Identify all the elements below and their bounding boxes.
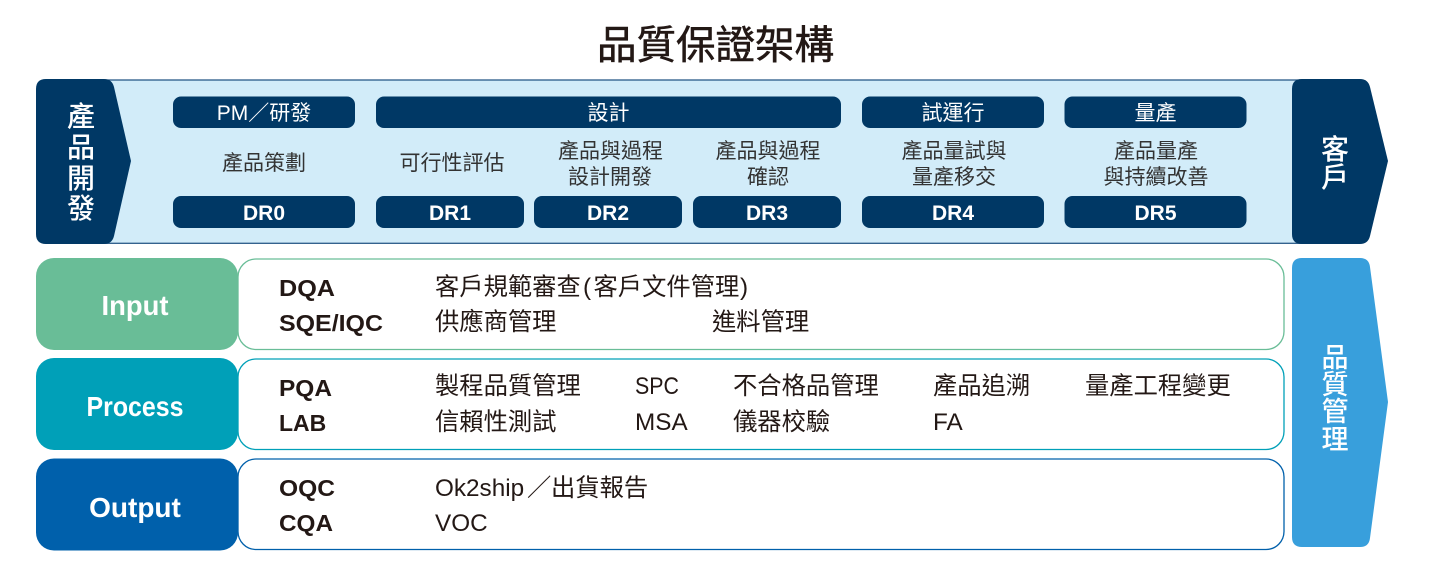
arrow: quality management (1292, 258, 1388, 547)
title: 品質保證架構 (597, 24, 834, 68)
roles and tasks: input: 供應商管理 (435, 309, 556, 336)
design review gates (173, 196, 1246, 228)
panel: product development band (36, 79, 1388, 244)
arrow: product development: 開 (67, 163, 95, 194)
arrow: customer: 客 (1321, 134, 1349, 165)
phase: mass production (1064, 96, 1246, 128)
roles and tasks: process: 信賴性測試 (435, 409, 556, 436)
label: input (36, 258, 238, 350)
roles and tasks: process: LAB (279, 410, 326, 436)
design review gates: DR4 (932, 202, 974, 225)
phase: design: 設計 (588, 102, 630, 125)
roles and tasks: output (279, 475, 648, 537)
arrow: product development (36, 79, 131, 244)
phase: trial run: 試運行 (922, 102, 984, 125)
label: output (36, 458, 238, 550)
phase: mass production: 量產 (1134, 102, 1176, 125)
label: output: Output (89, 492, 181, 523)
stage descriptions: 設計開發 (568, 166, 652, 189)
phase: PM (173, 96, 355, 128)
roles and tasks: process (279, 373, 1231, 436)
phase: trial run (862, 96, 1044, 128)
arrow: quality management: 品 (1322, 343, 1348, 373)
roles and tasks: output: OQC (279, 475, 335, 501)
stage descriptions: 產品量試與 (902, 140, 1006, 163)
stage descriptions: 產品量產 (1114, 140, 1198, 163)
roles and tasks: process: 儀器校驗 (733, 409, 830, 436)
design review gates: DR2 (587, 202, 629, 225)
arrow: quality management: 理 (1322, 425, 1348, 455)
arrow: customer (1292, 79, 1388, 244)
roles and tasks: output: CQA (279, 510, 333, 536)
roles and tasks: output: 出貨報告 (551, 475, 648, 502)
stage descriptions (222, 140, 1208, 189)
roles and tasks: input: SQE/IQC (279, 310, 383, 336)
roles and tasks: input: 進料管理 (712, 309, 809, 336)
stage descriptions: 產品與過程 (558, 140, 663, 163)
roles and tasks: input: ( (583, 274, 591, 301)
label: process (36, 358, 238, 450)
roles and tasks: process: MSA (635, 409, 688, 436)
design review gates: DR3 (746, 202, 788, 225)
design review gates: DR0 (243, 202, 285, 225)
roles and tasks: input: ) (740, 274, 748, 301)
phase: PM: PM／研發 (217, 102, 311, 125)
arrow: product development: 產 (67, 101, 95, 132)
roles and tasks: process: SPC (635, 373, 679, 400)
panel: input (36, 258, 1284, 350)
stage descriptions: 與持續改善 (1104, 166, 1208, 189)
arrow: quality management: 質 (1322, 370, 1348, 400)
roles and tasks: process: PQA (279, 375, 332, 401)
roles and tasks: input: 客戶文件管理 (594, 274, 739, 301)
roles and tasks: input: DQA (279, 275, 335, 301)
arrow: product development: 品 (67, 132, 95, 163)
stage descriptions: 產品與過程 (716, 140, 820, 163)
roles and tasks: output: VOC (435, 510, 488, 537)
stage descriptions: 產品策劃 (222, 152, 306, 175)
arrow: product development: 發 (67, 193, 95, 224)
roles and tasks: process: 產品追溯 (933, 373, 1030, 400)
roles and tasks: process: 不合格品管理 (733, 373, 879, 400)
design review gates: DR5 (1134, 202, 1177, 225)
roles and tasks: input (279, 274, 809, 336)
roles and tasks: process: 製程品質管理 (435, 373, 581, 400)
stage descriptions: 確認 (747, 166, 789, 189)
roles and tasks: output: Ok2ship (435, 475, 524, 502)
stage descriptions: 可行性評估 (400, 152, 504, 175)
design review gates: DR1 (429, 202, 471, 225)
stage descriptions: 量產移交 (912, 166, 996, 189)
roles and tasks: output: ／ (527, 475, 551, 502)
panel: output (36, 458, 1284, 550)
roles and tasks: process: FA (933, 409, 964, 436)
roles and tasks: input: 客戶規範審查 (435, 274, 581, 301)
phase: design (376, 96, 841, 128)
arrow: quality management: 管 (1322, 397, 1348, 427)
roles and tasks: process: 量產工程變更 (1085, 373, 1231, 400)
panel: process (36, 358, 1284, 450)
label: process: Process (86, 391, 184, 422)
arrow: customer: 戶 (1321, 162, 1349, 193)
label: input: Input (102, 290, 168, 321)
